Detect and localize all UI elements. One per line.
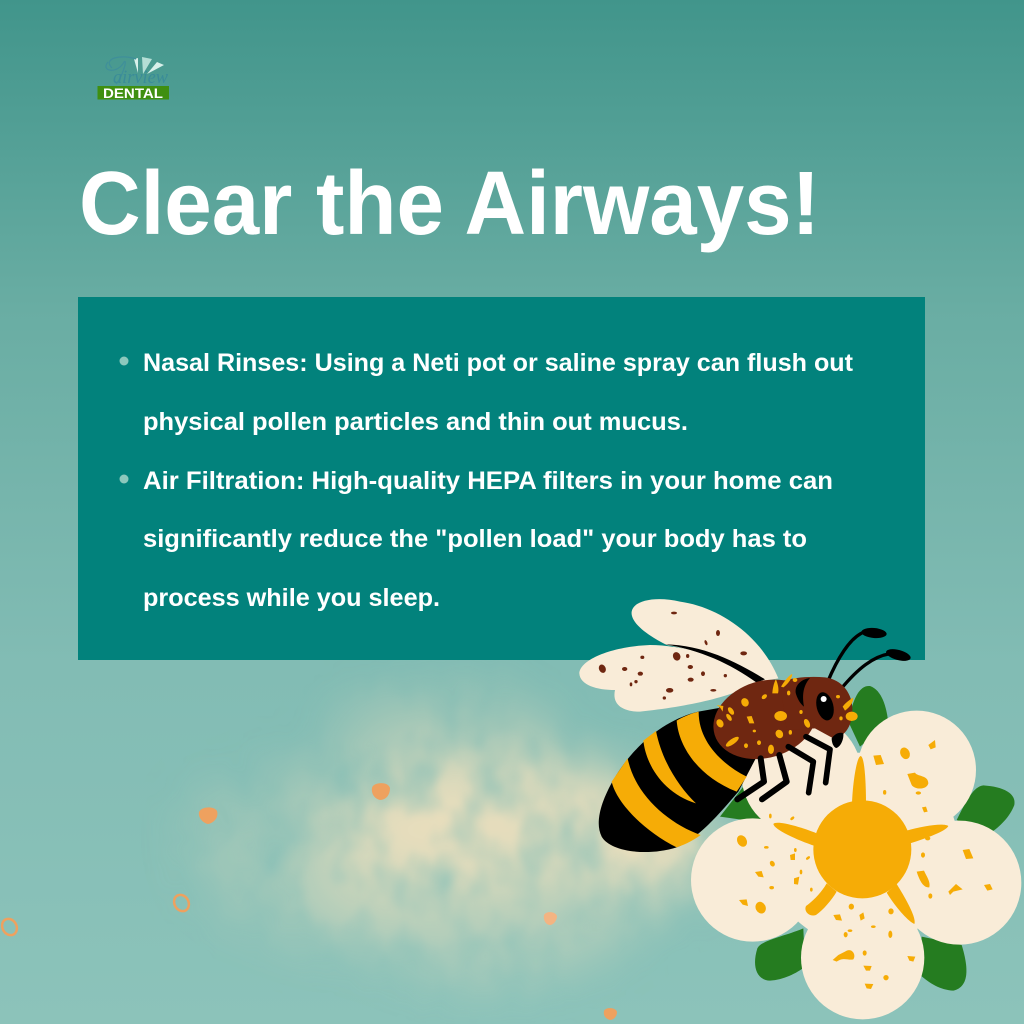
eye [813,690,837,722]
logo: Fairview Dental [98,57,169,101]
bullet: air filtration: process while you sleep. [143,584,440,612]
title: Clear the Airways! [79,154,820,254]
icon: bee [579,599,912,852]
bullet: nasal rinses [120,349,854,436]
pollen specks [735,740,993,989]
abdomen [599,707,757,852]
panel: tips [78,297,925,660]
bullet: nasal rinses: physical pollen particles and thin out mucus. [143,408,688,436]
wings [579,599,778,712]
eye highlight [821,696,827,702]
body spots [715,674,858,754]
logo word: DENTAL [103,85,163,101]
head [780,677,852,738]
pollen dots and rings [0,783,617,1020]
bullet: nasal rinses: Nasal Rinses: Using a Neti pot or saline spray can flush out [143,349,854,377]
illustration: bee on flower [579,599,1021,1019]
logo green band [98,86,169,100]
icon: flower [691,686,1021,1019]
collar [796,678,810,707]
logo swash [106,57,136,84]
logo fan rays [134,57,164,74]
petals [691,711,1021,1019]
bullet: air filtration: significantly reduce the "pollen load" your body has to [143,525,807,553]
mouth [832,733,843,748]
bullet: air filtration [120,467,833,612]
thorax [703,667,827,771]
flower centre [773,756,948,924]
wing spots [597,612,747,700]
pollen cloud [180,695,720,980]
legs [737,737,830,799]
leaves [720,686,1015,991]
wing vein [665,644,765,683]
logo script name: airview [113,67,168,88]
abdomen stripes [612,712,747,847]
bullet: air filtration: Air Filtration: High-quality HEPA filters in your home can [143,467,833,495]
antennae [827,632,893,689]
